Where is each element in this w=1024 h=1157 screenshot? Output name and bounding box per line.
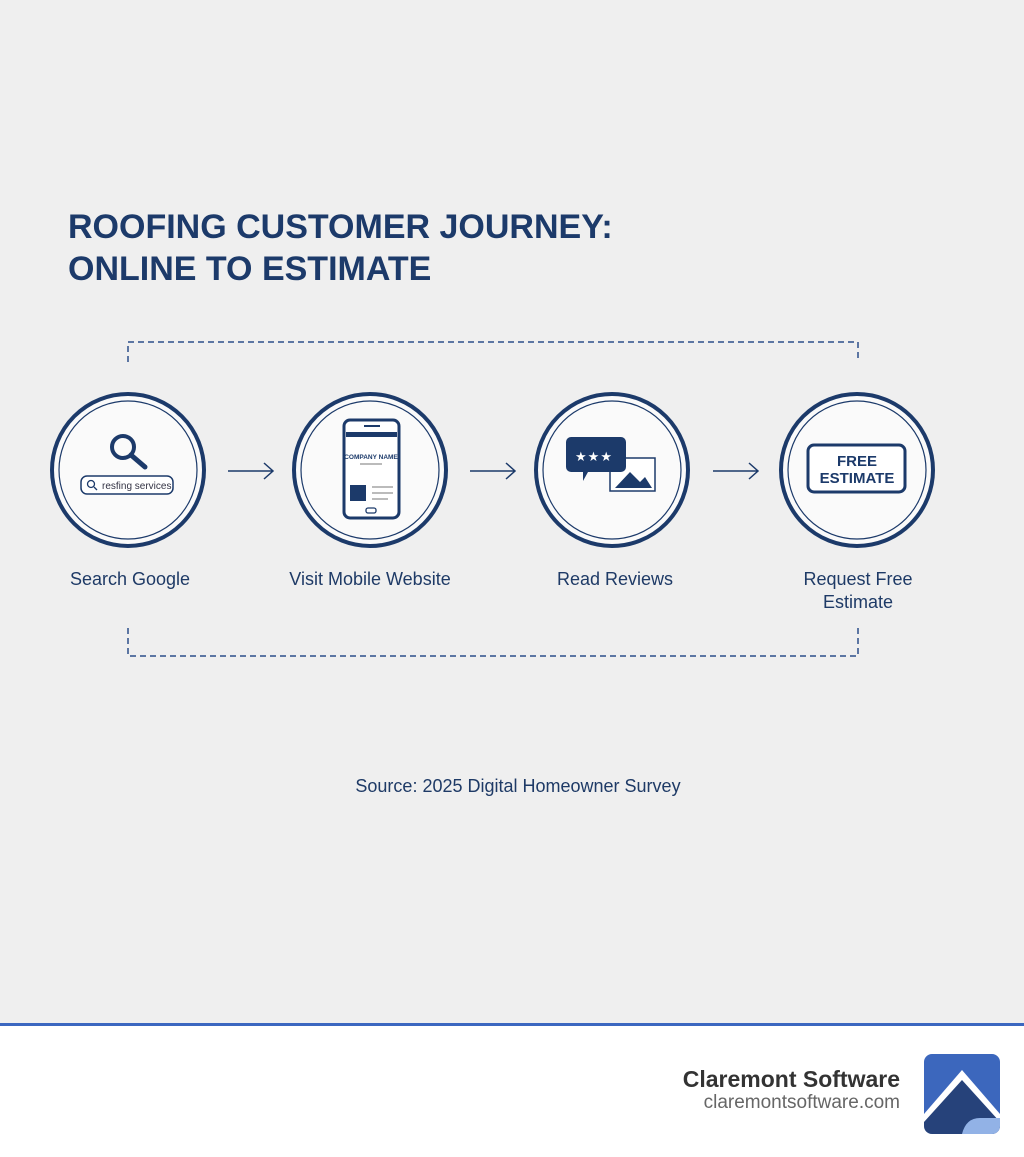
brand text: Claremont Software — [683, 1066, 900, 1092]
step 3 icon: reviews — [536, 394, 688, 546]
journey diagram — [50, 341, 935, 657]
step 4 icon: free estimate: ESTIMATE — [820, 470, 894, 487]
brand text — [683, 1066, 900, 1113]
step 4 icon: free estimate — [781, 394, 933, 546]
logo — [924, 1054, 1000, 1134]
label: step 4 — [803, 569, 913, 612]
title — [68, 208, 613, 288]
arrow — [713, 463, 758, 479]
source note: Source: 2025 Digital Homeowner Survey — [355, 776, 681, 796]
step 1 icon: search: resfing services — [102, 481, 171, 492]
brand text: claremontsoftware.com — [704, 1092, 900, 1113]
step 1 icon: search — [52, 394, 204, 546]
label: step 4: Request Free — [803, 569, 913, 589]
title: ROOFING CUSTOMER JOURNEY: — [68, 208, 613, 246]
step 2 icon: phone: COMPANY NAME — [344, 454, 398, 461]
step 4 icon: free estimate: FREE — [837, 453, 877, 470]
label: step 2: Visit Mobile Website — [289, 569, 451, 589]
step 3 icon: reviews: ★★★ — [575, 449, 613, 464]
label: step 1: Search Google — [70, 569, 190, 589]
label: step 3: Read Reviews — [557, 569, 673, 589]
footer — [0, 1023, 1024, 1157]
arrow — [228, 463, 273, 479]
arrow — [470, 463, 515, 479]
step 2 icon: phone — [294, 394, 446, 546]
label: step 4: Estimate — [823, 592, 893, 612]
title: ONLINE TO ESTIMATE — [68, 250, 431, 288]
